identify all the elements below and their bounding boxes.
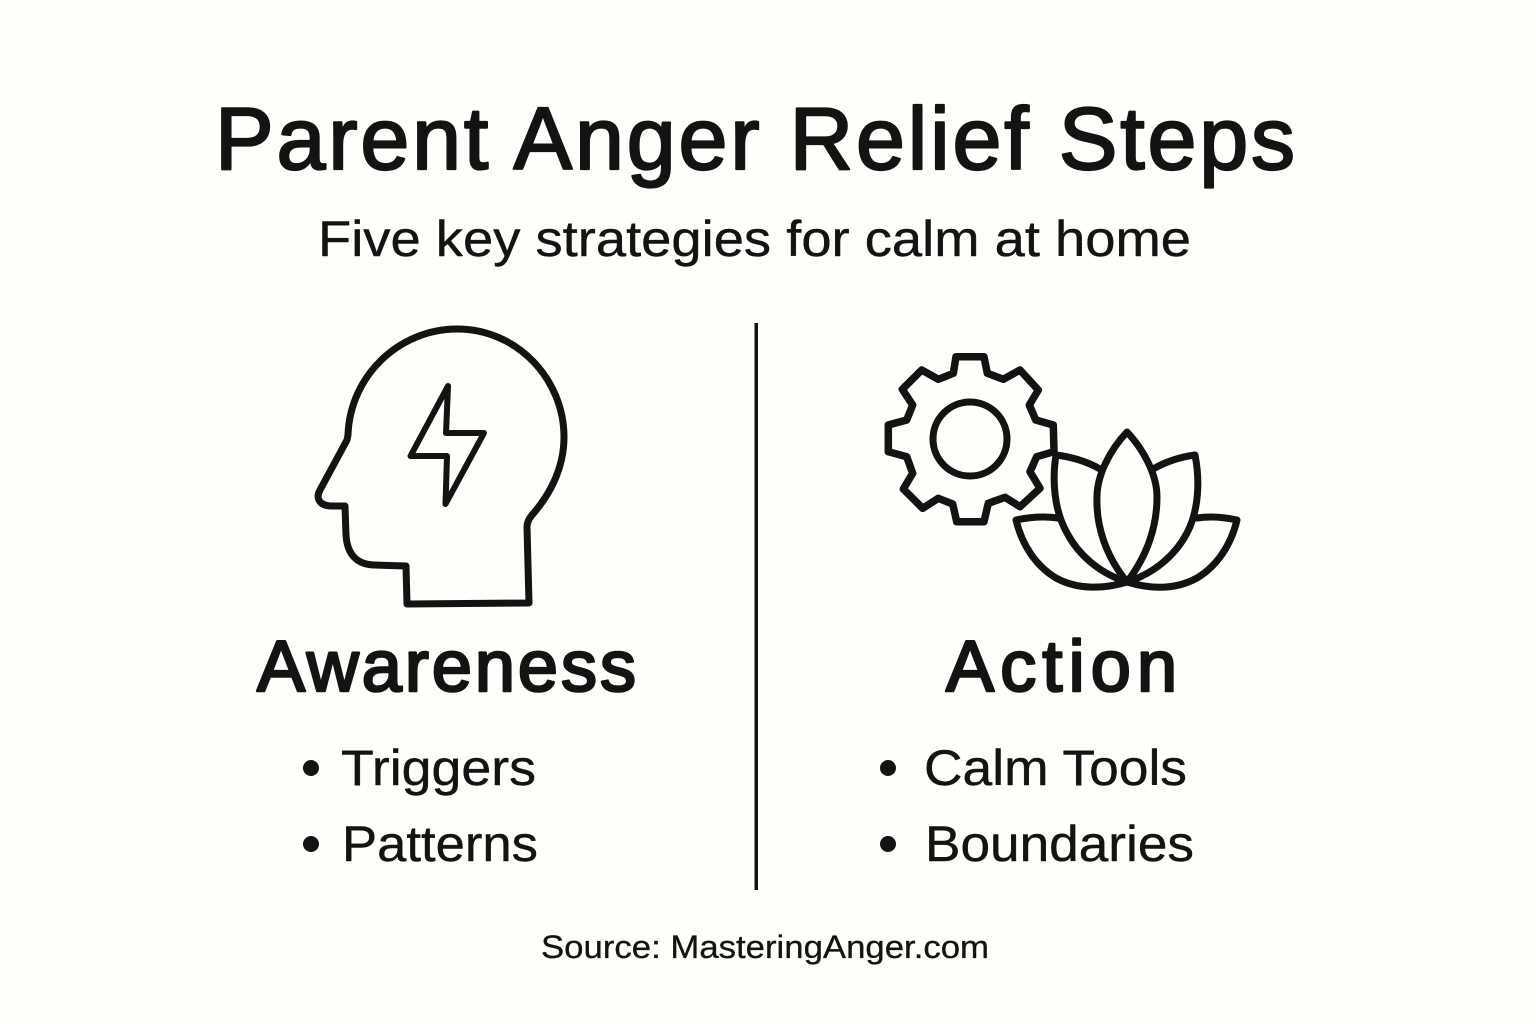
gear: [888, 357, 1054, 522]
subtitle: Five key strategies for calm at home: [318, 211, 1191, 267]
bullet: [880, 836, 896, 852]
bullet: [303, 836, 319, 852]
heading: action: Action: [946, 627, 1177, 707]
lotus inner right petal: [1130, 455, 1198, 581]
divider: [754, 323, 758, 890]
source note: Source: MasteringAnger.com: [541, 929, 989, 965]
lotus inner left petal: [1054, 455, 1124, 581]
icon: gear and lotus: [888, 357, 1237, 587]
bullet: [880, 760, 896, 776]
head outline: [318, 329, 564, 604]
lotus outer right petal: [1127, 517, 1237, 587]
item: boundaries: Boundaries: [925, 816, 1194, 872]
gear hub: [933, 402, 1007, 476]
lotus center petal: [1097, 432, 1157, 582]
lightning bolt: [410, 386, 484, 504]
list: action items: [880, 740, 1194, 872]
item: calm tools: Calm Tools: [924, 740, 1187, 796]
heading: awareness: Awareness: [257, 627, 636, 707]
bullet: [303, 760, 319, 776]
item: patterns: Patterns: [342, 816, 538, 872]
icon: head with lightning bolt: [318, 329, 564, 604]
list: awareness items: [303, 740, 538, 872]
item: triggers: Triggers: [341, 740, 536, 796]
lotus outer left petal: [1016, 517, 1127, 587]
title: Parent Anger Relief Steps: [215, 89, 1295, 188]
panel: action: [880, 357, 1237, 872]
panel: awareness: [257, 329, 636, 872]
